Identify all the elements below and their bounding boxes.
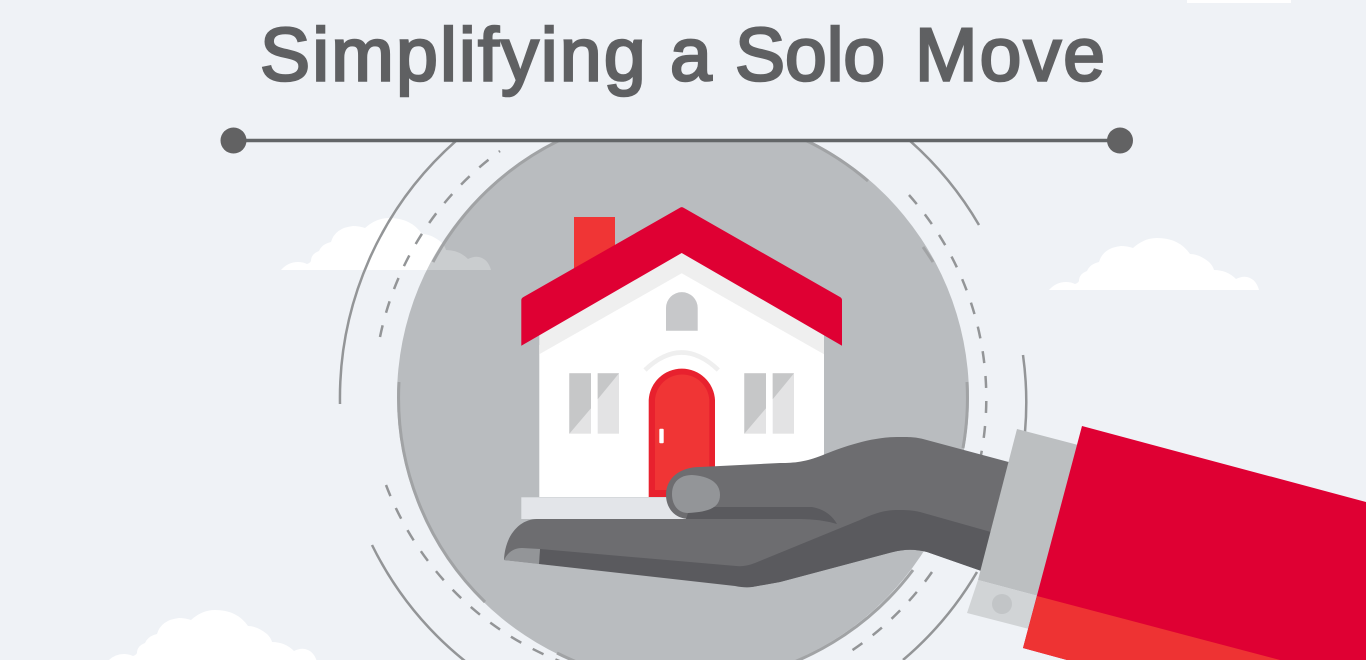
house <box>521 207 842 519</box>
orbit arcs: solid <box>340 140 1026 660</box>
doorstep <box>521 497 691 519</box>
hand <box>504 437 1020 587</box>
hand shadow <box>539 510 998 587</box>
cloud: right <box>1049 238 1259 290</box>
grey circle backdrop <box>397 142 969 660</box>
arch over door <box>645 352 718 370</box>
title: Solo <box>735 12 885 96</box>
hand base <box>504 437 1020 587</box>
roof <box>521 207 842 346</box>
title: Move <box>915 12 1107 96</box>
cloud: bottom left <box>107 610 317 660</box>
title: Simplifying <box>260 12 648 96</box>
left window <box>569 373 619 434</box>
attic window <box>666 292 698 331</box>
thumb shadow <box>686 507 837 524</box>
orbit arcs: dashed <box>380 151 986 660</box>
title divider line with end dots <box>220 128 1133 154</box>
fingertip nail <box>504 548 540 564</box>
right window <box>744 373 794 434</box>
door <box>649 369 715 497</box>
house wall <box>539 262 824 497</box>
cloud: left <box>281 218 491 270</box>
title: a <box>670 12 712 96</box>
thumb nail <box>672 475 720 513</box>
chimney <box>574 217 615 272</box>
shirt cuff <box>967 429 1082 630</box>
eave shadow <box>539 250 824 354</box>
red sleeve <box>1023 426 1366 660</box>
